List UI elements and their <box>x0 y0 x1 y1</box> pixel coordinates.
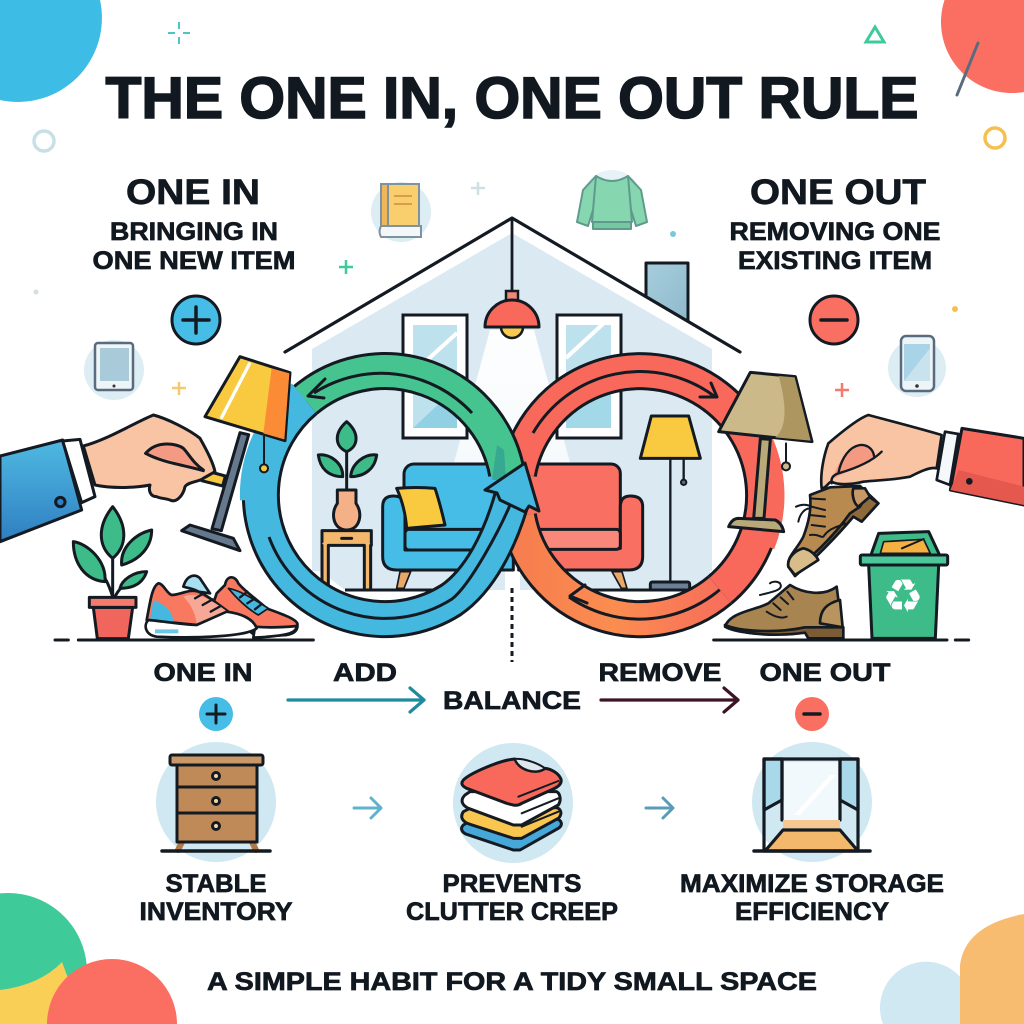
old shoe on floor <box>725 582 843 638</box>
blue lower loop <box>251 392 513 619</box>
benefit labels: CLUTTER CREEP <box>406 898 618 926</box>
heading: one out <box>730 173 940 275</box>
arrow: small <box>646 798 673 818</box>
flow labels: ONE IN <box>154 659 252 687</box>
text: removing one existing item <box>730 218 940 275</box>
flow labels: ONE OUT <box>760 659 890 687</box>
arrow: small <box>354 798 381 818</box>
front sneaker <box>146 576 257 637</box>
icon: small plus <box>199 697 233 731</box>
icon: folded clothes <box>453 743 573 863</box>
recycle symbol: ♻ <box>882 569 924 623</box>
ground line left <box>55 635 313 644</box>
back sneaker <box>213 577 298 638</box>
house <box>285 218 740 590</box>
orange lower loop <box>518 516 744 619</box>
decorative sparkles <box>34 22 1005 397</box>
blue armchair <box>383 464 514 588</box>
cuff <box>937 432 958 485</box>
corner shape: bottom left <box>0 893 177 1024</box>
icon: sweater <box>577 170 647 230</box>
icon: open storage window <box>752 742 872 862</box>
corner shape: top left <box>0 0 102 102</box>
flow labels: REMOVE <box>598 659 722 687</box>
left interior <box>318 422 514 588</box>
ground line right <box>714 635 969 644</box>
vase with plant <box>318 422 377 530</box>
arrow: add to balance <box>288 688 424 712</box>
text: removing one existing item: EXISTING ITEM <box>738 247 932 275</box>
red upper loop <box>518 371 773 590</box>
red sleeve <box>950 428 1024 505</box>
icon: dresser <box>156 742 276 862</box>
benefit labels: EFFICIENCY <box>735 898 889 926</box>
left scene: hand, lamp, plant <box>0 357 313 640</box>
roof line <box>285 218 740 352</box>
cuff <box>56 439 95 507</box>
icon: tablet <box>84 340 144 400</box>
old lamp <box>719 372 812 532</box>
house wall and roof fill <box>312 233 712 571</box>
hand removing shoe <box>821 415 942 488</box>
benefit labels: STABLE <box>166 870 266 898</box>
icon: small minus <box>795 697 829 731</box>
footer tagline: A SIMPLE HABIT FOR A TIDY SMALL SPACE <box>207 968 817 996</box>
ceiling lamp <box>485 218 539 338</box>
sneakers <box>146 576 298 638</box>
right hand and held shoe <box>788 415 958 576</box>
floor strip <box>320 571 710 590</box>
flow labels: ADD <box>333 659 397 687</box>
chimney <box>646 263 688 322</box>
infinity loop arrows <box>251 371 773 619</box>
title: THE ONE IN, ONE OUT RULE <box>106 66 918 131</box>
corner shape: bottom right <box>880 914 1024 1024</box>
arrow: balance to remove <box>601 688 738 712</box>
flow labels: BALANCE <box>443 687 581 715</box>
window right <box>557 315 621 438</box>
benefit labels <box>140 870 944 926</box>
blue arrowhead <box>485 463 539 512</box>
green upper loop <box>305 371 507 480</box>
icon: plus badge <box>172 296 220 344</box>
heading: one in: ONE IN <box>126 173 260 212</box>
heading: one out: ONE OUT <box>750 173 926 212</box>
floor lamp <box>640 416 700 590</box>
held shoe <box>788 486 878 576</box>
potted plant <box>73 507 152 639</box>
floor line inner <box>345 588 678 592</box>
benefit labels: PREVENTS <box>442 870 582 898</box>
side table <box>322 531 371 588</box>
light beam <box>452 330 572 571</box>
icon: minus badge <box>810 296 858 344</box>
icon: phone <box>888 336 946 397</box>
blue sleeve <box>0 440 82 542</box>
red armchair <box>519 464 643 588</box>
hand holding lamp <box>83 415 225 501</box>
lamp being brought in <box>182 357 290 551</box>
flow labels <box>154 659 890 715</box>
right scene: old lamp, sleeve, bin <box>714 372 1024 640</box>
window left <box>403 315 467 438</box>
right interior <box>519 416 700 590</box>
text: bringing in one new item: BRINGING IN <box>110 218 278 246</box>
benefit labels: INVENTORY <box>140 898 293 926</box>
recycling bin <box>860 532 948 638</box>
dotted balance line <box>510 588 514 662</box>
corner shape: top right <box>941 0 1024 95</box>
benefit labels: MAXIMIZE STORAGE <box>680 870 944 898</box>
text: removing one existing item: REMOVING ONE <box>730 218 940 246</box>
text: bringing in one new item: ONE NEW ITEM <box>92 247 296 275</box>
heading: one in <box>92 173 296 275</box>
room interior: left and right furniture <box>318 416 700 590</box>
icon: book <box>371 182 431 242</box>
text: bringing in one new item <box>92 218 296 275</box>
